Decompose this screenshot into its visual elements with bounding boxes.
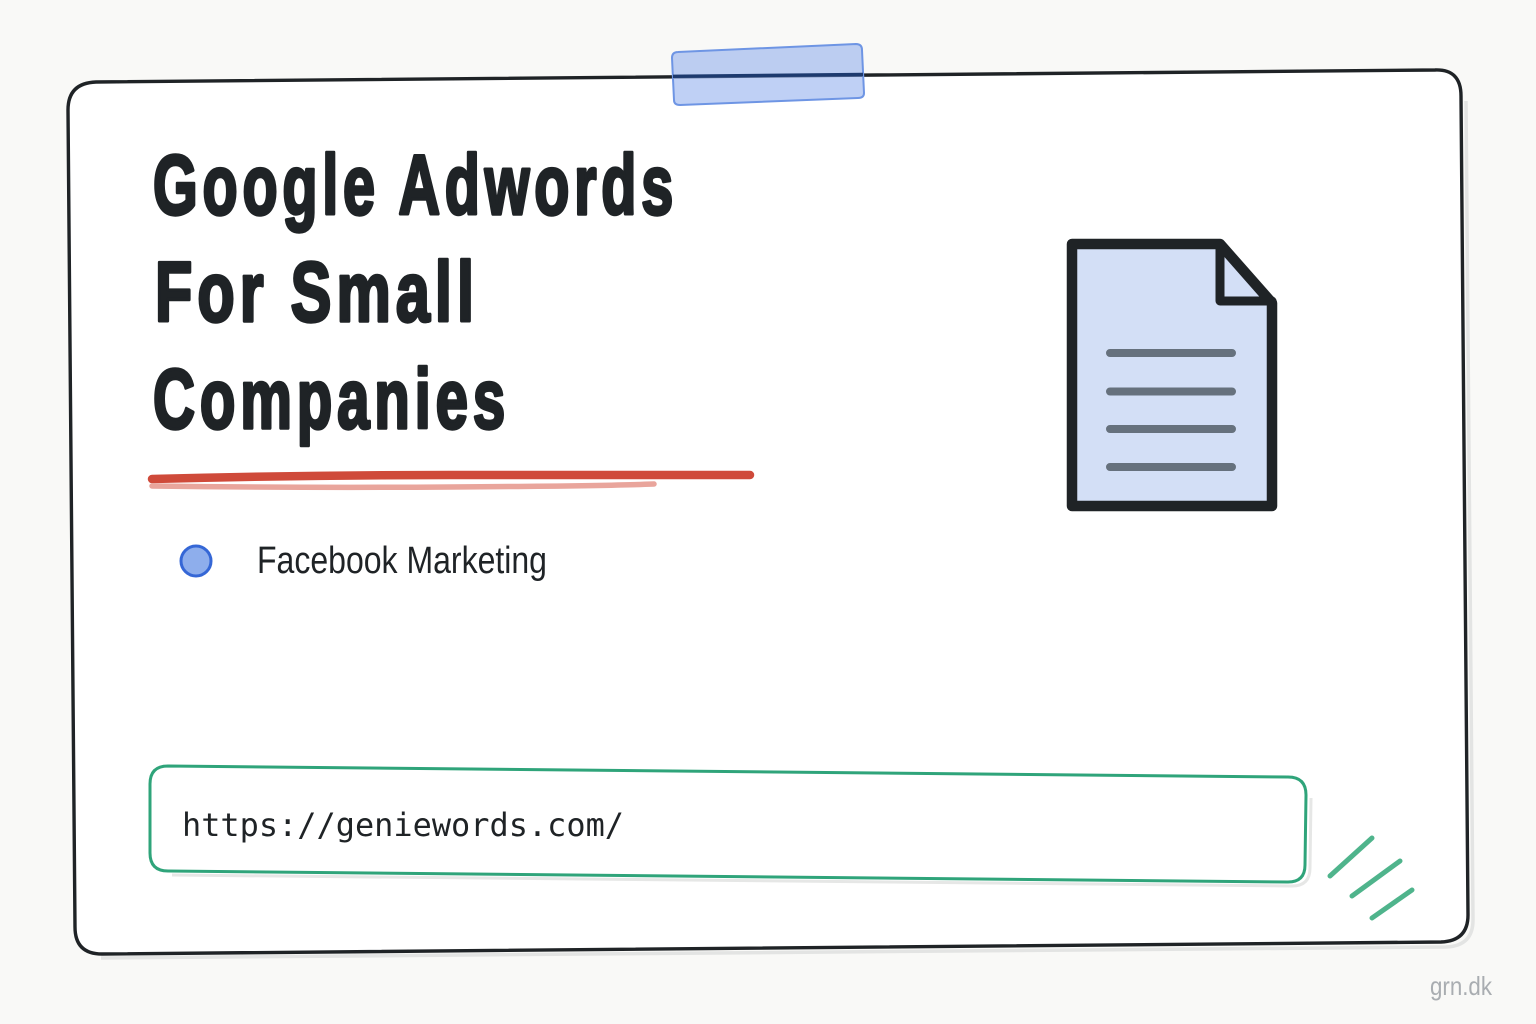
title line 1: Google Adwords (153, 138, 678, 232)
red title underline (152, 475, 750, 487)
bullet dot (181, 546, 211, 576)
URL text: https://geniewords.com/ (182, 806, 624, 844)
bullet label: Facebook Marketing (257, 540, 547, 582)
URL box (150, 766, 1311, 886)
accent hatch marks (1330, 838, 1412, 918)
title (153, 138, 678, 446)
bullet item: Facebook Marketing (181, 540, 547, 582)
panel: main card (68, 70, 1473, 958)
decorative tape (672, 44, 864, 105)
watermark: grn.dk (1430, 971, 1493, 1001)
title line 3: Companies (153, 352, 510, 446)
title line 2: For Small (155, 245, 479, 339)
icon: document (1072, 244, 1272, 506)
